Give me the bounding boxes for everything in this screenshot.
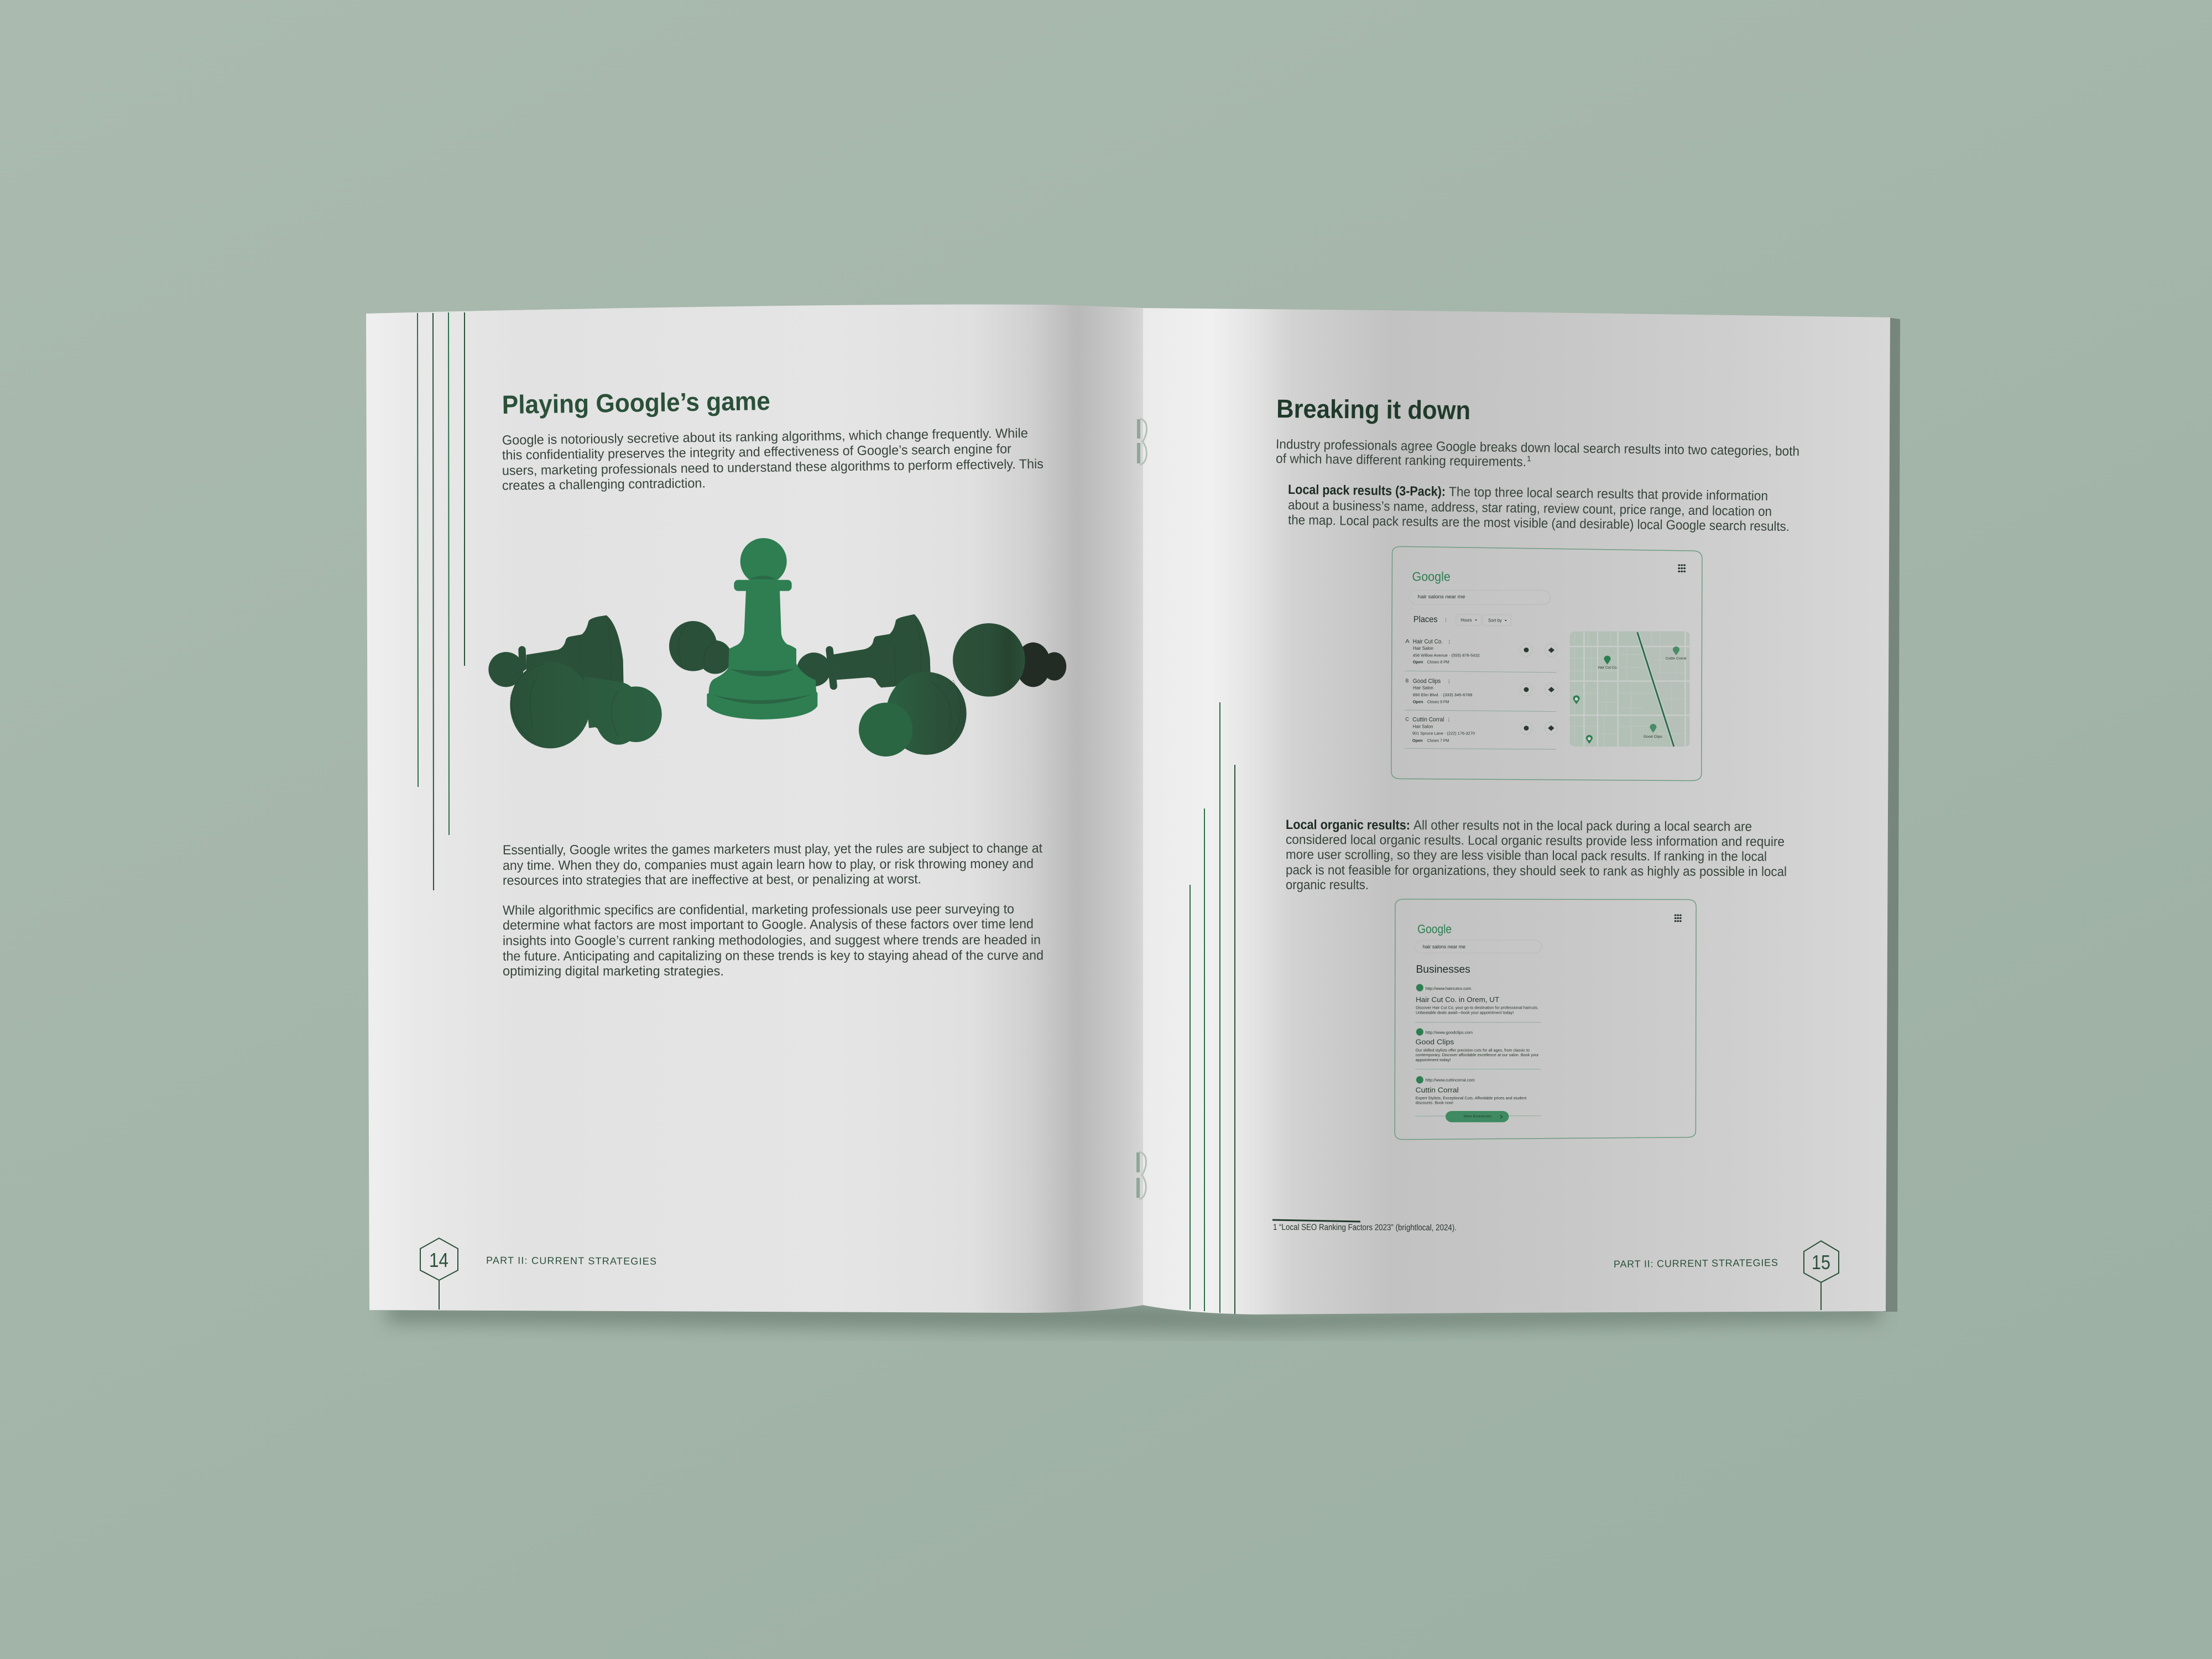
- local organic paragraph: All other results not in the local pack during a local search are: [1413, 818, 1752, 834]
- paragraph: Essentially: [503, 841, 1042, 888]
- intro paragraph: Google is notoriously secretive about its ranking algorithms, which change frequently. While: [502, 426, 1028, 448]
- more businesses button: More Businesses: [1464, 1114, 1491, 1119]
- centre standing pawn: [707, 538, 817, 719]
- listing B: B: [1406, 679, 1408, 684]
- listing A: Hair Salon: [1413, 646, 1433, 651]
- local organic paragraph: organic results.: [1286, 878, 1369, 893]
- binding staple top: [1139, 419, 1147, 465]
- result 1: [1415, 984, 1541, 1022]
- search box: [1409, 590, 1551, 604]
- listing B: Open: [1413, 700, 1423, 704]
- local pack paragraph: Local pack results (3-Pack):: [1288, 482, 1446, 499]
- local organic paragraph: Local organic results:: [1286, 817, 1410, 833]
- result 2: appointment today!: [1416, 1057, 1451, 1062]
- result 3: Cuttin Corral: [1416, 1087, 1459, 1094]
- result 2: http://www.goodclips.com: [1426, 1030, 1473, 1035]
- local organic paragraph: [1286, 817, 1787, 893]
- result 2: [1415, 1028, 1541, 1069]
- result 2: Good Clips: [1416, 1039, 1454, 1046]
- running footer left: PART II: CURRENT STRATEGIES: [486, 1255, 656, 1267]
- listing C: C: [1405, 717, 1409, 722]
- local pack mockup card: [1391, 546, 1702, 781]
- intro paragraph: [1276, 437, 1799, 469]
- listing C: Closes 7 PM: [1427, 738, 1449, 743]
- listing A: ⋮: [1447, 639, 1452, 645]
- listing C: 901 Spruce Lane · (222) 176-3270: [1412, 731, 1475, 735]
- footnote: [1272, 1220, 1457, 1233]
- book shadow: [387, 1300, 1880, 1332]
- intro paragraph: Industry professionals agree Google breaks down local search results into two categories, both: [1276, 437, 1799, 459]
- page number 14: [420, 1238, 458, 1310]
- listing A: Hair Cut Co.: [1413, 638, 1443, 645]
- google logo: Google: [1412, 570, 1451, 584]
- map: [1570, 632, 1690, 747]
- left page: [366, 304, 1143, 1313]
- local organic paragraph: pack is not feasible for organizations, they should seek to rank as highly as possible in local: [1286, 863, 1787, 879]
- local organic paragraph: more user scrolling, so they are less visible than local pack results. If ranking in the local: [1286, 847, 1767, 864]
- listing C: [1405, 716, 1557, 749]
- front pawn: [886, 672, 967, 755]
- places header and filters: [1413, 614, 1511, 626]
- local pack paragraph: [1288, 482, 1790, 534]
- more businesses button: [1446, 1111, 1509, 1122]
- listing C: Open: [1412, 738, 1423, 743]
- front pawn base: [510, 662, 662, 748]
- businesses heading: Businesses: [1416, 963, 1470, 975]
- result 1: Discover Hair Cut Co, your go-to destination for professional haircuts.: [1416, 1005, 1538, 1010]
- local organic paragraph: considered local organic results. Local organic results provide less information and require: [1286, 832, 1785, 849]
- result 3: Expert Stylists, Exceptional Cuts. Affordable prices and student: [1416, 1095, 1527, 1100]
- listing A: Open: [1413, 660, 1423, 664]
- listing A: 456 Willow Avenue · (555) 876-5432: [1413, 653, 1480, 658]
- result 3: [1415, 1076, 1541, 1116]
- paragraph: While algorithmic: [503, 902, 1044, 979]
- paragraph: While algorithmic: determine what factors are most important to Google. Analysis of these factors over time lend: [503, 916, 1034, 933]
- paragraph: While algorithmic: optimizing digital marketing strategies.: [503, 964, 724, 979]
- map: Cuttin Corral: [1666, 656, 1687, 660]
- listing C: ⋮: [1446, 717, 1452, 723]
- intro paragraph: of which have different ranking requirements.: [1276, 451, 1526, 469]
- listing B: Good Clips: [1413, 677, 1441, 685]
- result 1: http://www.haircutco.com: [1426, 986, 1472, 991]
- listing B: Hair Salon: [1413, 686, 1433, 690]
- paragraph: While algorithmic: the future. Anticipating and capitalizing on these trends is key to staying ahead of the curve and: [503, 948, 1044, 964]
- result 3: discounts. Book now!: [1416, 1100, 1453, 1105]
- google logo: Google: [1417, 923, 1452, 936]
- small pawn behind centre: [669, 621, 717, 671]
- page number 15: 15: [1812, 1251, 1830, 1274]
- paragraph: Essentially: Essentially, Google writes the games marketers must play, yet the rules are subject to change at: [503, 841, 1042, 858]
- page number 15: [1804, 1241, 1839, 1310]
- search box: [1415, 940, 1542, 953]
- map: Good Clips: [1644, 734, 1662, 739]
- search box: hair salons near me: [1418, 594, 1465, 600]
- far right fallen pawn: [1042, 652, 1066, 681]
- map pins: [1573, 646, 1679, 744]
- result 1: Unbeatable deals await—book your appointment today!: [1416, 1010, 1514, 1015]
- places header and filters: Places: [1413, 614, 1438, 624]
- knocked pieces, right: [797, 614, 1066, 757]
- paragraph: While algorithmic: insights into Google’s current ranking methodologies, and suggest where trends are headed in: [503, 932, 1041, 948]
- apps grid icon: [1674, 914, 1682, 922]
- map: Hair Cut Co.: [1598, 665, 1618, 670]
- listing B: [1405, 677, 1558, 712]
- heading: Playing Google's game: Playing Google’s game: [502, 386, 770, 419]
- search box: hair salons near me: [1423, 945, 1465, 950]
- listing C: Cuttin Corral: [1412, 716, 1444, 723]
- intro paragraph: users, marketing professionals need to understand these algorithms to perform effectively. This: [502, 457, 1044, 478]
- places header and filters: Hours: [1460, 618, 1472, 623]
- apps grid icon: [1678, 564, 1686, 572]
- result 2: contemporary. Discover affordable excellence at our salon. Book your: [1416, 1052, 1539, 1057]
- listing B: Closes 9 PM: [1427, 700, 1449, 704]
- listing B: 890 Elm Blvd. · (333) 345-6789: [1413, 693, 1473, 697]
- page stack edge: [1883, 317, 1900, 1312]
- local pack paragraph: the map. Local pack results are the most visible (and desirable) local Google search results.: [1288, 513, 1790, 534]
- chess illustration: [488, 538, 1066, 757]
- paragraph: While algorithmic: While algorithmic specifics are confidential, marketing professionals use peer surveying to: [503, 902, 1014, 918]
- listing A: A: [1405, 639, 1410, 644]
- listing B: ⋮: [1446, 679, 1452, 685]
- listing A: [1405, 638, 1558, 672]
- intro paragraph: [502, 426, 1044, 493]
- intro paragraph: creates a challenging contradiction.: [502, 476, 706, 493]
- paragraph: Essentially: any time. When they do, companies must again learn how to play, or risk throwing money and: [503, 857, 1034, 873]
- places header and filters: ⋮: [1443, 617, 1449, 623]
- local pack paragraph: about a business’s name, address, star rating, review count, price range, and location on: [1288, 498, 1772, 519]
- knocked rook-like pawn, left back: [488, 615, 732, 748]
- page number 14: 14: [429, 1249, 448, 1271]
- local organic mockup card: [1395, 899, 1696, 1140]
- running footer right: PART II: CURRENT STRATEGIES: [1614, 1257, 1778, 1270]
- listing A: Closes 8 PM: [1427, 660, 1449, 664]
- left page vertical lines: [418, 312, 465, 890]
- places header and filters: Sort by: [1488, 618, 1502, 623]
- result 3: http://www.cuttincorral.com: [1426, 1078, 1475, 1082]
- result 2: Our skilled stylists offer precision cuts for all ages, from classic to: [1416, 1048, 1530, 1052]
- listing C: Hair Salon: [1413, 724, 1433, 729]
- intro paragraph: this confidentiality preserves the integrity and effectiveness of Google’s search engine for: [502, 441, 1011, 463]
- right page: [1143, 308, 1890, 1314]
- result 1: Hair Cut Co. in Orem, UT: [1416, 996, 1499, 1004]
- footnote: 1 “Local SEO Ranking Factors 2023” (brightlocal, 2024).: [1273, 1223, 1457, 1233]
- intro paragraph: 1: [1527, 454, 1531, 463]
- heading: Breaking it down: Breaking it down: [1276, 394, 1470, 425]
- right page vertical lines: [1190, 702, 1235, 1314]
- paragraph: Essentially: resources into strategies that are ineffective at best, or penalizing at worst.: [503, 872, 921, 888]
- binding staple bottom: [1138, 1152, 1146, 1199]
- local pack paragraph: The top three local search results that provide information: [1449, 484, 1768, 504]
